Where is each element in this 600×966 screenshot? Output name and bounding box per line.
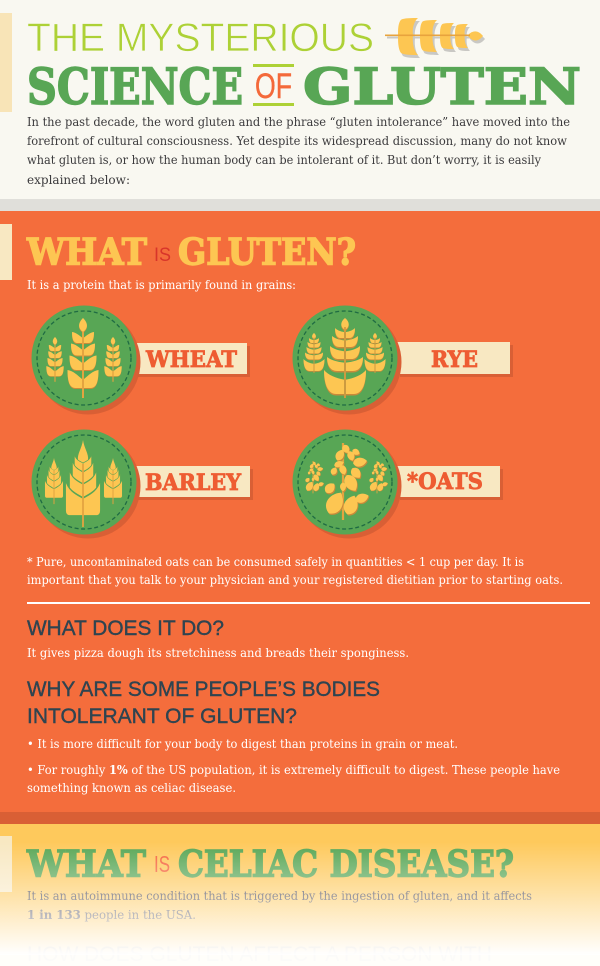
intro text bbox=[27, 115, 570, 187]
answer text: It gives pizza dough its stretchiness and breads their sponginess. bbox=[27, 646, 409, 660]
grain: rye: RYE bbox=[431, 347, 478, 373]
icon: wheat ear bbox=[385, 18, 485, 58]
title line: the mysterious: THE MYSTERIOUS bbox=[27, 16, 374, 60]
bullet list: • For roughly 1% of the US population, it is extremely difficult to digest. These people have bbox=[27, 763, 560, 777]
heading: what is gluten: IS bbox=[154, 244, 171, 266]
celiac description: It is an autoimmune condition that is triggered by the ingestion of gluten, and it affects bbox=[27, 889, 532, 903]
grain: rye bbox=[292, 306, 513, 414]
oats footnote bbox=[27, 555, 563, 587]
intro text: forefront of cultural consciousness. Yet despite its widespread discussion, many do not know bbox=[27, 134, 568, 148]
panel: header bbox=[0, 0, 600, 211]
panel: what is gluten bbox=[0, 211, 600, 824]
intro text: what gluten is, or how the human body can be intolerant of it. But don’t worry, it is easily bbox=[27, 153, 541, 167]
grain: wheat bbox=[32, 306, 250, 414]
title line: science of gluten: SCIENCE bbox=[27, 57, 243, 116]
heading: what is celiac disease: WHAT bbox=[26, 844, 146, 886]
heading: what is celiac disease: IS bbox=[154, 851, 170, 877]
title line: science of gluten bbox=[27, 57, 581, 116]
title line: science of gluten: OF bbox=[255, 67, 292, 106]
bullet list: • It is more difficult for your body to digest than proteins in grain or meat. bbox=[27, 737, 458, 751]
heading: what is celiac disease bbox=[26, 844, 514, 886]
heading: what is gluten bbox=[26, 232, 356, 274]
title line: science of gluten: GLUTEN bbox=[303, 57, 581, 116]
section side tab bbox=[0, 836, 12, 892]
header side tab bbox=[0, 13, 12, 112]
intro sentence: It is a protein that is primarily found in grains: bbox=[27, 278, 296, 292]
grain: barley: BARLEY bbox=[145, 470, 241, 496]
oats footnote: * Pure, uncontaminated oats can be consumed safely in quantities < 1 cup per day. It is bbox=[27, 555, 524, 569]
panel: what is celiac disease bbox=[0, 824, 600, 966]
oats footnote: important that you talk to your physician and your registered dietitian prior to starting oats. bbox=[27, 573, 563, 587]
celiac description bbox=[27, 889, 532, 922]
subheading: what does it do: WHAT DOES IT DO? bbox=[27, 617, 224, 640]
grain: oats bbox=[292, 430, 503, 538]
celiac description: 1 in 133 people in the USA. bbox=[27, 908, 196, 922]
section side tab bbox=[0, 224, 12, 280]
intro text: In the past decade, the word gluten and the phrase “gluten intolerance” have moved into the bbox=[27, 115, 570, 129]
grain: barley bbox=[32, 430, 253, 538]
intro text: explained below: bbox=[27, 173, 130, 187]
subheading: why intolerant bbox=[27, 678, 380, 728]
bullet list bbox=[27, 737, 560, 795]
heading: what is celiac disease: CELIAC DISEASE? bbox=[178, 844, 514, 886]
heading: what is gluten: GLUTEN? bbox=[178, 232, 356, 274]
heading: what is gluten: WHAT bbox=[26, 232, 147, 274]
grain: wheat: WHEAT bbox=[145, 347, 238, 373]
subheading: why intolerant: WHY ARE SOME PEOPLE’S BODIES bbox=[27, 678, 380, 701]
faded subheading: HOW DOES GLUTEN AFFECT A PERSON WITH bbox=[27, 943, 492, 966]
subheading: why intolerant: INTOLERANT OF GLUTEN? bbox=[27, 705, 297, 728]
grain: oats: *OATS bbox=[407, 469, 483, 495]
bullet list: something known as celiac disease. bbox=[27, 781, 236, 795]
